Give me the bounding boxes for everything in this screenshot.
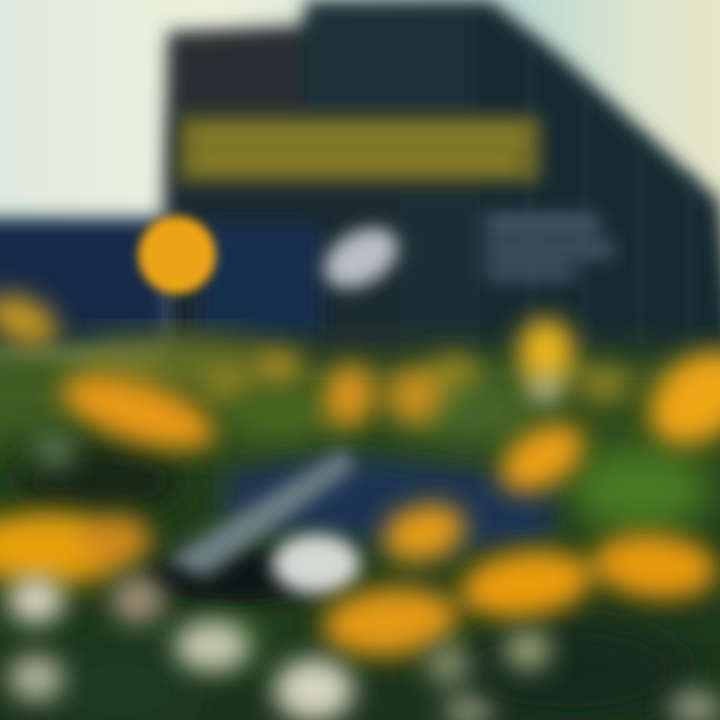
solar building [160,0,720,380]
white leaf icon [313,215,409,301]
lower blue panel [225,455,555,555]
white flower center [272,534,360,594]
panel stripes on right slope [530,50,690,350]
yellow banner [178,116,540,182]
lower left blue solar panel [0,218,170,353]
sky background [0,0,720,380]
grey text block [485,214,615,280]
foliage ground [0,338,720,720]
dark shadow under panel [145,547,325,603]
orange sun circle [138,216,216,294]
small white blossoms [8,374,720,720]
yellow flowers [0,284,720,662]
grey-white diagonal beam [165,448,355,578]
middle blue solar panel [200,225,320,340]
